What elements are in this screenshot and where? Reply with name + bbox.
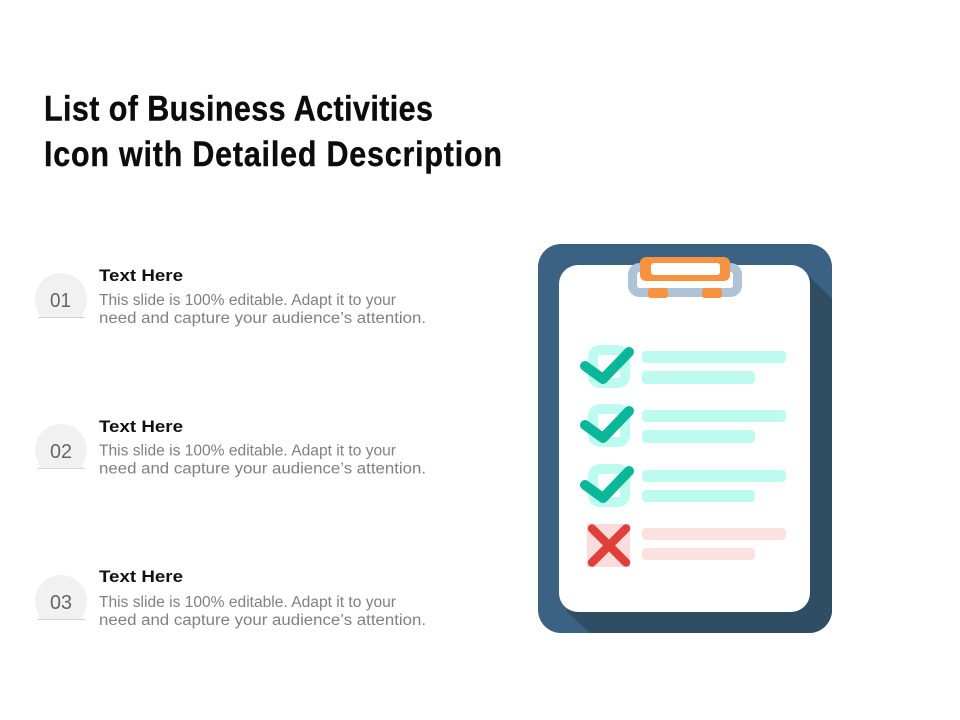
icon: clipboard xyxy=(538,244,832,633)
number badge 02: 02 xyxy=(50,441,72,463)
description 03: need and capture your audience’s attention. xyxy=(99,612,426,629)
number badge 01: 01 xyxy=(50,290,71,312)
number badge 03: 03 xyxy=(50,592,72,614)
description 01: This slide is 100% editable. Adapt it to your xyxy=(99,292,396,309)
description 02: This slide is 100% editable. Adapt it to your xyxy=(99,442,396,460)
board long shadow xyxy=(566,275,832,633)
number badge 02 xyxy=(35,424,87,469)
checklist row 2 xyxy=(585,409,786,443)
list item 03 xyxy=(35,567,426,629)
paper sheet xyxy=(559,265,810,612)
title: List of Business Activities xyxy=(44,88,433,128)
heading 02: Text Here xyxy=(99,417,183,436)
list item 01 xyxy=(35,266,426,327)
heading 03: Text Here xyxy=(99,567,183,586)
description 03: This slide is 100% editable. Adapt it to your xyxy=(99,594,396,611)
clipboard board xyxy=(538,244,832,633)
title xyxy=(44,88,502,173)
title: Icon with Detailed Description xyxy=(44,134,502,173)
number badge 03 xyxy=(35,575,87,620)
description 02: need and capture your audience’s attention. xyxy=(99,460,426,478)
clip xyxy=(632,257,738,298)
heading 01: Text Here xyxy=(99,266,183,285)
checklist row 3 xyxy=(585,469,786,502)
description 02 xyxy=(99,442,426,478)
description 03 xyxy=(99,594,426,629)
description 01: need and capture your audience’s attention. xyxy=(99,310,426,327)
list item 02 xyxy=(35,417,426,478)
number badge 01 xyxy=(35,273,87,318)
checklist row 1 xyxy=(585,350,786,384)
checklist row 4: rejected xyxy=(587,524,786,567)
description 01 xyxy=(99,292,426,327)
